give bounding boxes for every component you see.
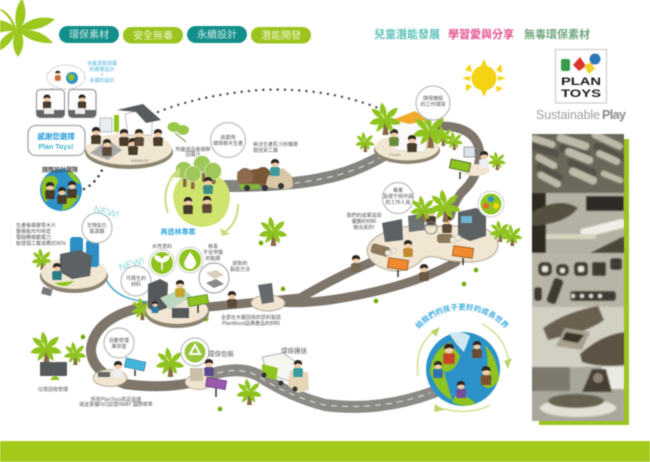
icon: non-toxic glue drop: [177, 247, 203, 273]
text: waste wood note: [221, 314, 281, 327]
bubble: automatic inventory: 自動管理: [109, 337, 129, 344]
worker carrying board: [227, 291, 237, 308]
text: design note: +: [101, 72, 104, 78]
label: new biogas: NEW!: [92, 204, 120, 221]
brand values heading: [374, 27, 590, 41]
text: design note: 兒童潛能發展: [87, 60, 117, 67]
photo: wooden shapes: [530, 253, 626, 307]
road: factory forks: [208, 262, 372, 307]
text: design note: 的專業設計: [89, 66, 115, 73]
text: harvested trees: [175, 146, 211, 158]
callout: thanks for choosing Plan Toys: Plan Toys!: [39, 144, 73, 151]
label: new material: NEW!: [118, 256, 146, 274]
left factory platform: [40, 237, 108, 293]
brand values heading: 學習愛與分享: [448, 27, 514, 41]
small gray device: [41, 287, 53, 296]
corner palm decoration: [0, 0, 55, 57]
left-center palm: [131, 298, 153, 320]
arc text: a better world for our children: 給我們的孩子更好的成長世界: [414, 302, 510, 330]
road: factory lower fork: [280, 262, 456, 303]
photo: hand and rods: [530, 193, 626, 253]
text: biogas explanation: 整條能均勻噪音: [16, 228, 51, 235]
bubble: biogas plant: 能源廠: [89, 228, 105, 235]
thought bubble with designer and globe: [47, 65, 85, 92]
central factory platform: [145, 279, 209, 328]
Bangkok platform: BANGKOK: [131, 159, 149, 163]
text: design note: 永續的設計: [89, 77, 115, 84]
text: design note: [87, 60, 117, 84]
icon: coloured dots: [478, 191, 504, 217]
palm near recycling: [156, 348, 184, 377]
house platform: [374, 111, 440, 164]
road network: [91, 126, 480, 407]
photo column: [529, 130, 629, 425]
bubble: working environment: 的工作環境: [420, 101, 446, 108]
palm upper factory left: [410, 196, 436, 222]
trees by Bangkok: [168, 122, 189, 142]
card: designer two: [68, 90, 96, 118]
photo: wood rods: [529, 130, 626, 194]
bubble: renewable material: 材料: [131, 281, 141, 288]
logo: TOYS: [561, 88, 601, 100]
bubble: skilled workers: 及便于操作員: [383, 193, 413, 200]
bubble: eco rubber wood: 由愛用: [220, 134, 236, 141]
road: delivery to globe: [212, 370, 434, 407]
road: truck to house: [226, 155, 384, 186]
factory platform: [367, 208, 498, 277]
category pills: 環保素材: [69, 28, 109, 41]
palm right factory: [490, 220, 510, 242]
heading: eco shipping: 環保運送: [281, 346, 308, 355]
bubble: automatic inventory: [104, 328, 134, 358]
tanks: [70, 237, 99, 267]
card: designer one: [36, 90, 64, 118]
label: water-based paint: 水性塗料: [152, 243, 172, 250]
palm near delivery: [236, 379, 262, 405]
text: harvested trees: 回風汁: [185, 151, 201, 158]
bubble: eco rubber wood: [210, 122, 246, 158]
palm far left house: [355, 132, 375, 152]
palm by house right small: [433, 126, 453, 146]
sign: orange left: [387, 258, 409, 277]
sign: purple: [205, 377, 227, 397]
Bangkok platform: [85, 104, 173, 169]
text: waste wood note: PlanWood品牌產品的材料: [222, 320, 280, 327]
globe: a better world: [417, 324, 512, 412]
sign: orange right: [452, 246, 474, 265]
brand values heading: 兒童潛能發展: [374, 27, 440, 41]
tagline: Sustainable: [536, 108, 600, 122]
icon: recycled packaging: [181, 338, 209, 366]
log truck: [237, 159, 293, 191]
category pills: 安全無毒: [133, 29, 173, 42]
label: innovative manufacturing: 製造方法: [230, 266, 250, 273]
text: biogas explanation: 電極轉換動電力: [16, 234, 51, 241]
label: non-toxic glue: [203, 243, 223, 262]
text: harvested trees: 所搬成品後樹幹: [175, 146, 211, 153]
palm by bins small: [64, 342, 86, 365]
bubble: biogas plant: [82, 213, 112, 243]
road: central to recycling: [91, 306, 190, 386]
bubble: working environment: [416, 86, 450, 120]
sign: blue: [124, 358, 146, 376]
arrows around reforestation: [165, 172, 238, 233]
label: innovative manufacturing: 創新的: [232, 260, 248, 267]
machine: [408, 213, 425, 232]
tagline emphasis: Play: [602, 108, 626, 122]
worker at laptop with sign: [449, 147, 490, 179]
bubble: renewable material: [121, 266, 151, 296]
text: quality material: 我們的成果是與: [346, 212, 382, 219]
text: quality material: 做出來的!: [353, 224, 375, 231]
bubble: automatic inventory: 庫存室: [111, 343, 127, 350]
bubble: working environment: 環保機組: [423, 95, 443, 102]
bottom green bar: [0, 441, 650, 462]
international design team globe: 國際設計團隊: [42, 166, 78, 174]
center palm: [259, 217, 287, 246]
text: biogas explanation: 始發個工廠浪費近90%: [16, 240, 67, 247]
decorative leaf dots: [80, 240, 478, 412]
photo: workshop with tray: [530, 367, 626, 423]
green shadow: [539, 139, 629, 425]
bubble: renewable material: 可再生的: [126, 275, 146, 282]
photo: hands on wooden block: [530, 306, 626, 367]
reforestation scene: [165, 156, 238, 236]
delivery truck: [262, 353, 309, 393]
palm by laptop: [488, 151, 506, 170]
logs: [370, 234, 453, 257]
building: [117, 104, 161, 135]
label: non-toxic glue: 的黏膠: [205, 255, 221, 262]
brand values heading: 無毒環保素材: [524, 27, 590, 41]
callout: thanks for choosing Plan Toys: [28, 126, 85, 156]
palm by bins: [30, 331, 62, 364]
category pills: 永續設計: [197, 28, 237, 41]
tool platform: [251, 283, 285, 311]
label: non-toxic glue: 不含甲醛: [203, 249, 223, 256]
text: rubber trees to factory: 樹送到工廠: [253, 147, 278, 154]
label: waste management: 垃圾回收管理: [38, 386, 68, 393]
label: non-toxic glue: 無毒: [208, 243, 218, 250]
label: innovative manufacturing: [230, 260, 250, 273]
callout: thanks for choosing Plan Toys: 感謝您選擇: [37, 131, 75, 141]
palm left factory: [32, 248, 52, 270]
text: rubber trees to factory: 無法生產乳汁的橡膠: [253, 141, 298, 148]
wheel: [425, 222, 437, 234]
palm right factory two: [502, 224, 522, 246]
text: waste wood note: 全部在木廠回收的原料製造: [221, 314, 281, 321]
text: quality material: 優勝的材料: [351, 218, 377, 225]
palm by house left: [369, 102, 401, 135]
globe arrows: [417, 324, 509, 411]
category pills: 潛能開發: [261, 29, 301, 42]
bubble: biogas plant: 生物氣化: [87, 222, 107, 229]
sign: green work: [449, 159, 471, 179]
text: ISO certification: [79, 396, 153, 408]
bubble: skilled workers: 專業: [393, 187, 403, 194]
icon: sun: [462, 59, 506, 97]
carrying worker right: [419, 264, 429, 281]
palm right small: [445, 131, 463, 150]
heading: eco packaging: 環保包裝: [208, 349, 234, 358]
text: quality material: [346, 212, 382, 231]
text: biogas explanation: 生產每條膠帶木片: [16, 222, 56, 229]
bin group: [40, 362, 67, 380]
palm by house right: [413, 112, 447, 148]
text: ISO certification: 過並更優ISO認證/IWAY 國際標準: [79, 401, 153, 408]
packaging platform: [185, 359, 227, 397]
bubble: skilled workers: [382, 182, 414, 214]
road: house to factory: [440, 126, 480, 216]
house platform: Phuket: [390, 153, 400, 157]
logo: PLAN: [561, 76, 601, 88]
icon: water-based paint sprout: [149, 250, 175, 276]
international design team globe: [40, 166, 82, 211]
heading: reforestation project: 再造林專案: [160, 227, 196, 236]
bubble: manufacturing method: [199, 263, 229, 293]
bubble: eco rubber wood: 環保樹木生產: [213, 140, 243, 147]
machine: [458, 208, 486, 241]
designer cards: [36, 90, 96, 118]
inventory platform: [93, 358, 146, 386]
carrying worker left: [351, 255, 361, 272]
logo: [556, 50, 606, 103]
machine: [382, 219, 403, 242]
text: ISO certification: 所有PlanToys商品皆通: [91, 396, 141, 403]
pipe: biogas to machine: [104, 274, 150, 302]
text: biogas explanation: [16, 222, 67, 247]
dotted path: globe to Bangkok: [84, 170, 102, 189]
dotted path: Bangkok to factory house: [158, 90, 378, 112]
text: rubber trees to factory: [253, 141, 298, 154]
palm upper factory right: [429, 189, 461, 222]
bubble: skilled workers: 的工作人員: [385, 199, 411, 206]
sign: green: [187, 294, 209, 313]
category pills: [59, 26, 311, 44]
